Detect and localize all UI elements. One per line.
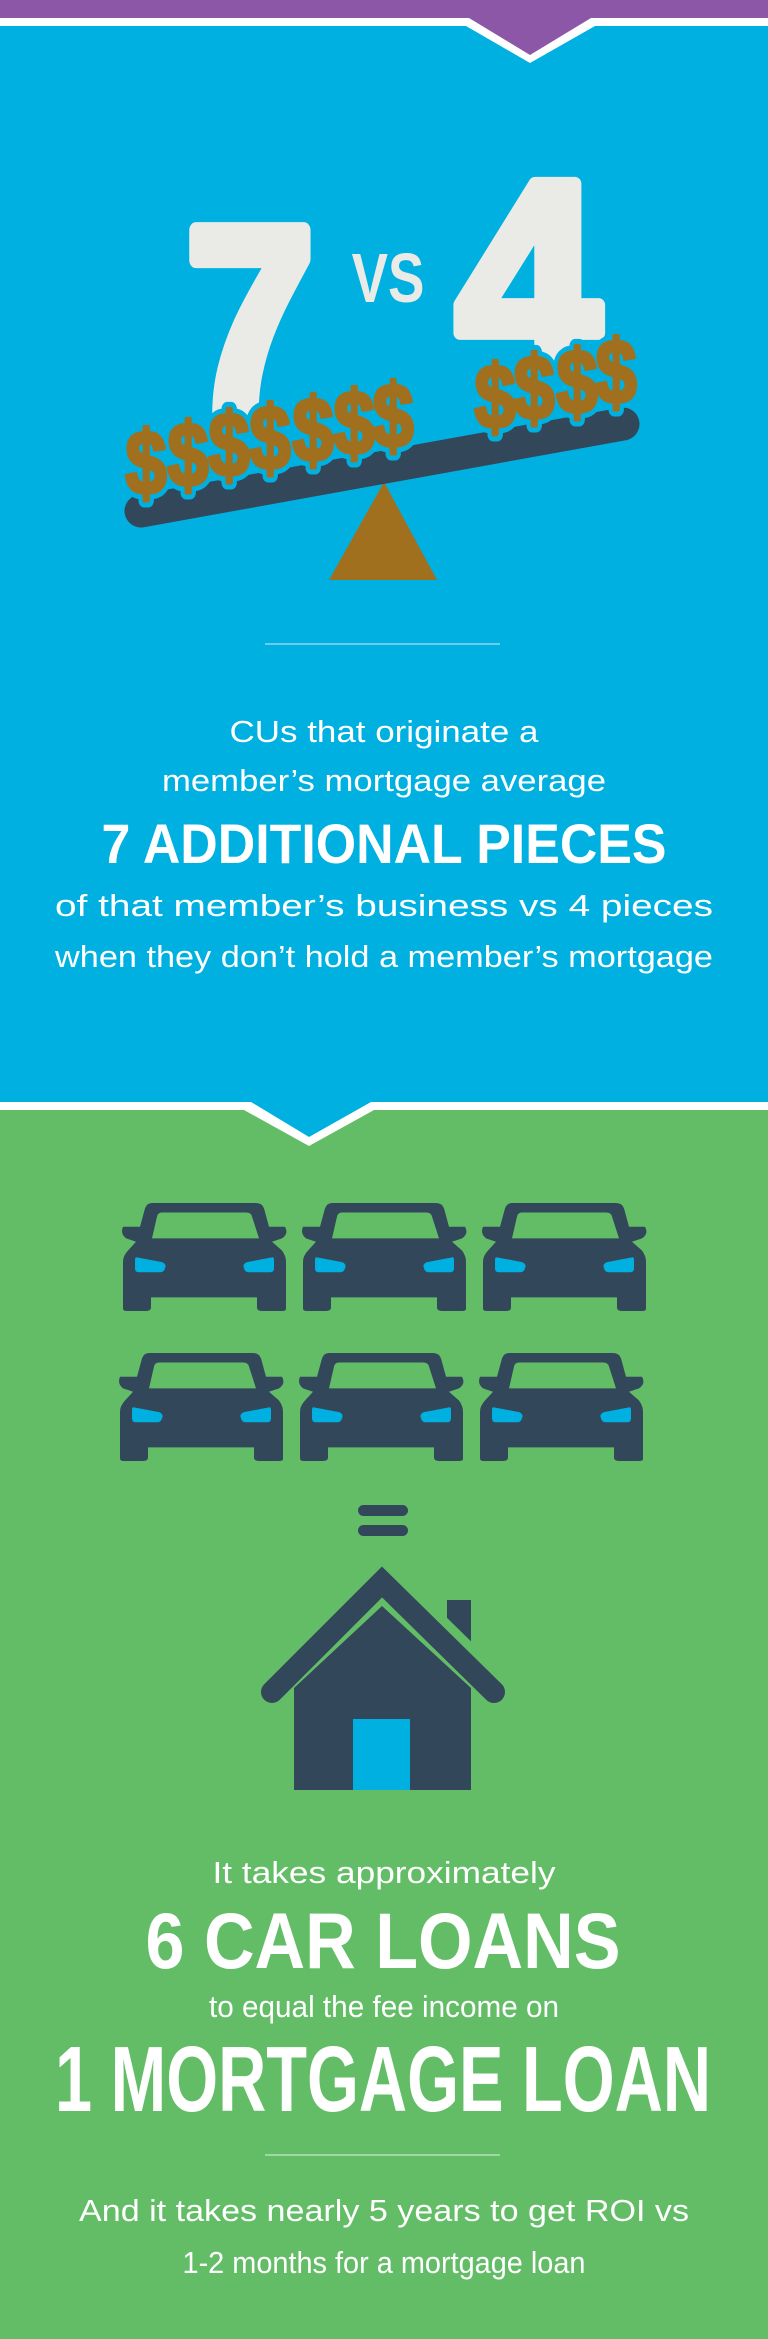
dollar signs left (7): $ — [249, 389, 291, 489]
dollar signs left (7): $ — [333, 374, 375, 474]
headline: 7 additional pieces: 7 ADDITIONAL PIECES — [102, 812, 666, 875]
icon: house — [272, 1582, 494, 1790]
top banner with chevron — [0, 0, 768, 63]
dollar signs left (7): $ — [125, 414, 167, 514]
blue section background — [0, 0, 768, 1104]
dollar signs left (7): $ — [167, 406, 209, 506]
green section background — [0, 1104, 768, 2339]
text block: mortgage statistic: of that member’s business vs 4 pieces — [55, 888, 713, 923]
icon: equals sign — [358, 1505, 408, 1536]
section divider chevron — [0, 1098, 768, 1146]
dollar signs left (7) — [125, 367, 414, 514]
beam — [141, 424, 623, 511]
dollar signs right (4): $ — [556, 333, 598, 433]
dollar signs left (7): $ — [292, 381, 334, 481]
text block: mortgage statistic: when they don’t hold a member’s mortgage — [54, 939, 713, 974]
text block: mortgage statistic — [54, 714, 713, 974]
dollar signs left (7): $ — [372, 367, 414, 467]
dollar signs right (4): $ — [474, 348, 516, 448]
text block: ROI: 1-2 months for a mortgage loan — [182, 2245, 586, 2280]
dollar signs right (4): $ — [556, 333, 598, 433]
text block: ROI — [79, 2193, 689, 2280]
text block: car loans vs mortgage — [55, 1855, 711, 2131]
dollar signs left (7): $ — [292, 381, 334, 481]
text block: mortgage statistic: CUs that originate a — [230, 714, 539, 749]
dollar signs right (4): $ — [513, 339, 555, 439]
vs label: VS — [352, 240, 424, 318]
number 4: 4 — [456, 126, 601, 429]
dollar signs right (4) — [474, 323, 637, 448]
dollar signs left (7): $ — [372, 367, 414, 467]
dollar signs right (4): $ — [595, 323, 637, 423]
fulcrum — [329, 482, 437, 580]
dollar signs left (7): $ — [167, 406, 209, 506]
dollar signs right (4): $ — [513, 339, 555, 439]
text block: car loans vs mortgage: to equal the fee income on — [209, 1989, 559, 2024]
headline: 6 car loans: 6 CAR LOANS — [146, 1896, 620, 1985]
number 7: 7 — [186, 172, 314, 471]
seesaw illustration: 7 vs 4 — [125, 126, 637, 580]
dollar signs left (7): $ — [249, 389, 291, 489]
text block: ROI: And it takes nearly 5 years to get ROI vs — [79, 2193, 689, 2228]
dollar signs left (7): $ — [333, 374, 375, 474]
text block: mortgage statistic: member’s mortgage average — [162, 763, 606, 798]
dollar signs right (4): $ — [595, 323, 637, 423]
dollar signs left (7): $ — [208, 396, 250, 496]
dollar signs left (7): $ — [125, 414, 167, 514]
icons: six cars — [119, 1203, 646, 1461]
dollar signs right (4): $ — [474, 348, 516, 448]
text block: car loans vs mortgage: It takes approximately — [212, 1855, 556, 1890]
dollar signs left (7): $ — [208, 396, 250, 496]
